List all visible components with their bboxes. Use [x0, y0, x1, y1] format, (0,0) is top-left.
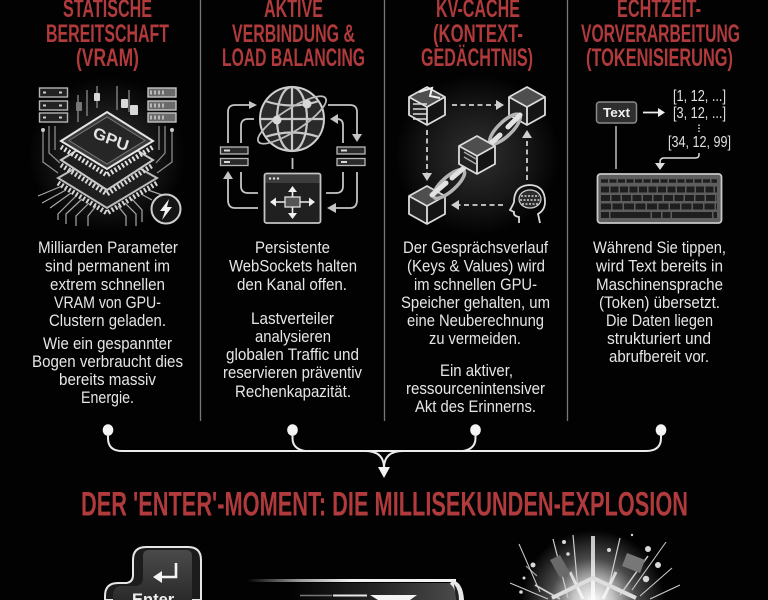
body text: WebSockets: WebSockets halten: [229, 258, 357, 276]
body text: Tokenisierung: wird Text bereits in: [595, 258, 723, 276]
heading: KV-Cache: GEDÄCHTNIS): [421, 44, 533, 72]
body text: Gesprächsverlauf: ressourcenintensiver: [406, 380, 545, 398]
icon: stacked GPU chip: GPU: [91, 123, 131, 155]
heading: Aktive Verbindung: LOAD BALANCING: [222, 44, 365, 72]
body text: VRAM: Clustern geladen.: [49, 312, 166, 330]
icon: enter key: [105, 547, 201, 600]
body text: Gesprächsverlauf: Der Gesprächsverlauf: [403, 239, 548, 257]
icon: data tube with envelope: [247, 579, 464, 600]
body text: Tokenisierung: Maschinensprache: [596, 276, 723, 294]
traces below chip: [38, 186, 165, 226]
panel: KV cache: [395, 0, 559, 416]
heading: Echtzeit-Vorverarbeitung: [581, 0, 740, 72]
body text: VRAM: Milliarden Parameter: [38, 239, 178, 257]
body text: Gesprächsverlauf: (Keys & Values) wird: [407, 258, 545, 276]
body text: WebSockets: den Kanal offen.: [237, 276, 347, 294]
body text: Gesprächsverlauf: Speicher gehalten, um: [401, 294, 550, 312]
heading: KV-Cache: [421, 0, 533, 72]
body text: Gesprächsverlauf: zu vermeiden.: [429, 330, 521, 348]
body text: WebSockets: reservieren präventiv: [223, 364, 363, 382]
body text: VRAM: [32, 239, 183, 407]
body text: WebSockets: analysieren: [255, 328, 331, 346]
body text: VRAM: bereits massiv: [59, 371, 157, 389]
body text: VRAM: VRAM von GPU-: [54, 294, 161, 312]
body text: WebSockets: [223, 239, 363, 401]
icon: explosion of light and particles: [510, 530, 680, 600]
body text: Gesprächsverlauf: Akt des Erinnerns.: [415, 398, 536, 416]
icon: text to tokens and keyboard: [3, 12, ...]: [673, 105, 726, 122]
icon: text to tokens and keyboard: [596, 88, 731, 223]
body text: Tokenisierung: Die Daten liegen: [606, 312, 713, 330]
icon: text to tokens and keyboard: [1, 12, ...]: [673, 88, 726, 105]
body text: WebSockets: Rechenkapazität.: [235, 383, 351, 401]
body text: VRAM: Bogen verbraucht dies: [32, 353, 183, 371]
icon: cubes linked by chain: [395, 75, 559, 235]
panel: active connection and load balancing: [220, 0, 365, 401]
body text: VRAM: extrem schnellen: [50, 276, 165, 294]
body text: Tokenisierung: abrufbereit vor.: [609, 348, 709, 366]
icon: text to tokens and keyboard: [34, 12, 99]: [668, 134, 731, 151]
connector: four branches merging into arrow: [103, 424, 666, 478]
body text: Gesprächsverlauf: [401, 239, 550, 416]
icon: text to tokens and keyboard: Text: [603, 105, 631, 120]
body text: Gesprächsverlauf: im schnellen GPU-: [414, 276, 537, 294]
body text: WebSockets: globalen Traffic und: [226, 346, 359, 364]
body text: Tokenisierung: strukturiert und: [607, 330, 711, 348]
heading: Statische Bereitschaft: [46, 0, 169, 72]
body text: WebSockets: Lastverteiler: [251, 310, 334, 328]
body text: VRAM: sind permanent im: [45, 258, 170, 276]
body text: Gesprächsverlauf: eine Neuberechnung: [407, 312, 544, 330]
body text: Tokenisierung: [593, 239, 726, 366]
body text: Gesprächsverlauf: Ein aktiver,: [440, 362, 513, 380]
body text: Tokenisierung: (Token) übersetzt.: [599, 294, 720, 312]
body text: Tokenisierung: Während Sie tippen,: [593, 239, 726, 257]
body text: VRAM: Energie.: [81, 389, 134, 407]
panel: real-time tokenisation: [581, 0, 740, 366]
panel: static readiness VRAM: [29, 0, 185, 407]
heading: Statische Bereitschaft: BEREITSCHAFT: [46, 20, 169, 48]
body text: VRAM: Wie ein gespannter: [43, 335, 172, 353]
body text: WebSockets: Persistente: [255, 239, 330, 257]
heading: KV-Cache: (KONTEXT-: [433, 20, 523, 48]
heading: Aktive Verbindung: [222, 0, 365, 72]
heading: Statische Bereitschaft: (VRAM): [76, 44, 139, 72]
heading: Aktive Verbindung: VERBINDUNG &: [232, 20, 355, 48]
icon: stacked GPU chip: [29, 77, 185, 233]
icon: globe with load balancing loop: [220, 87, 365, 223]
